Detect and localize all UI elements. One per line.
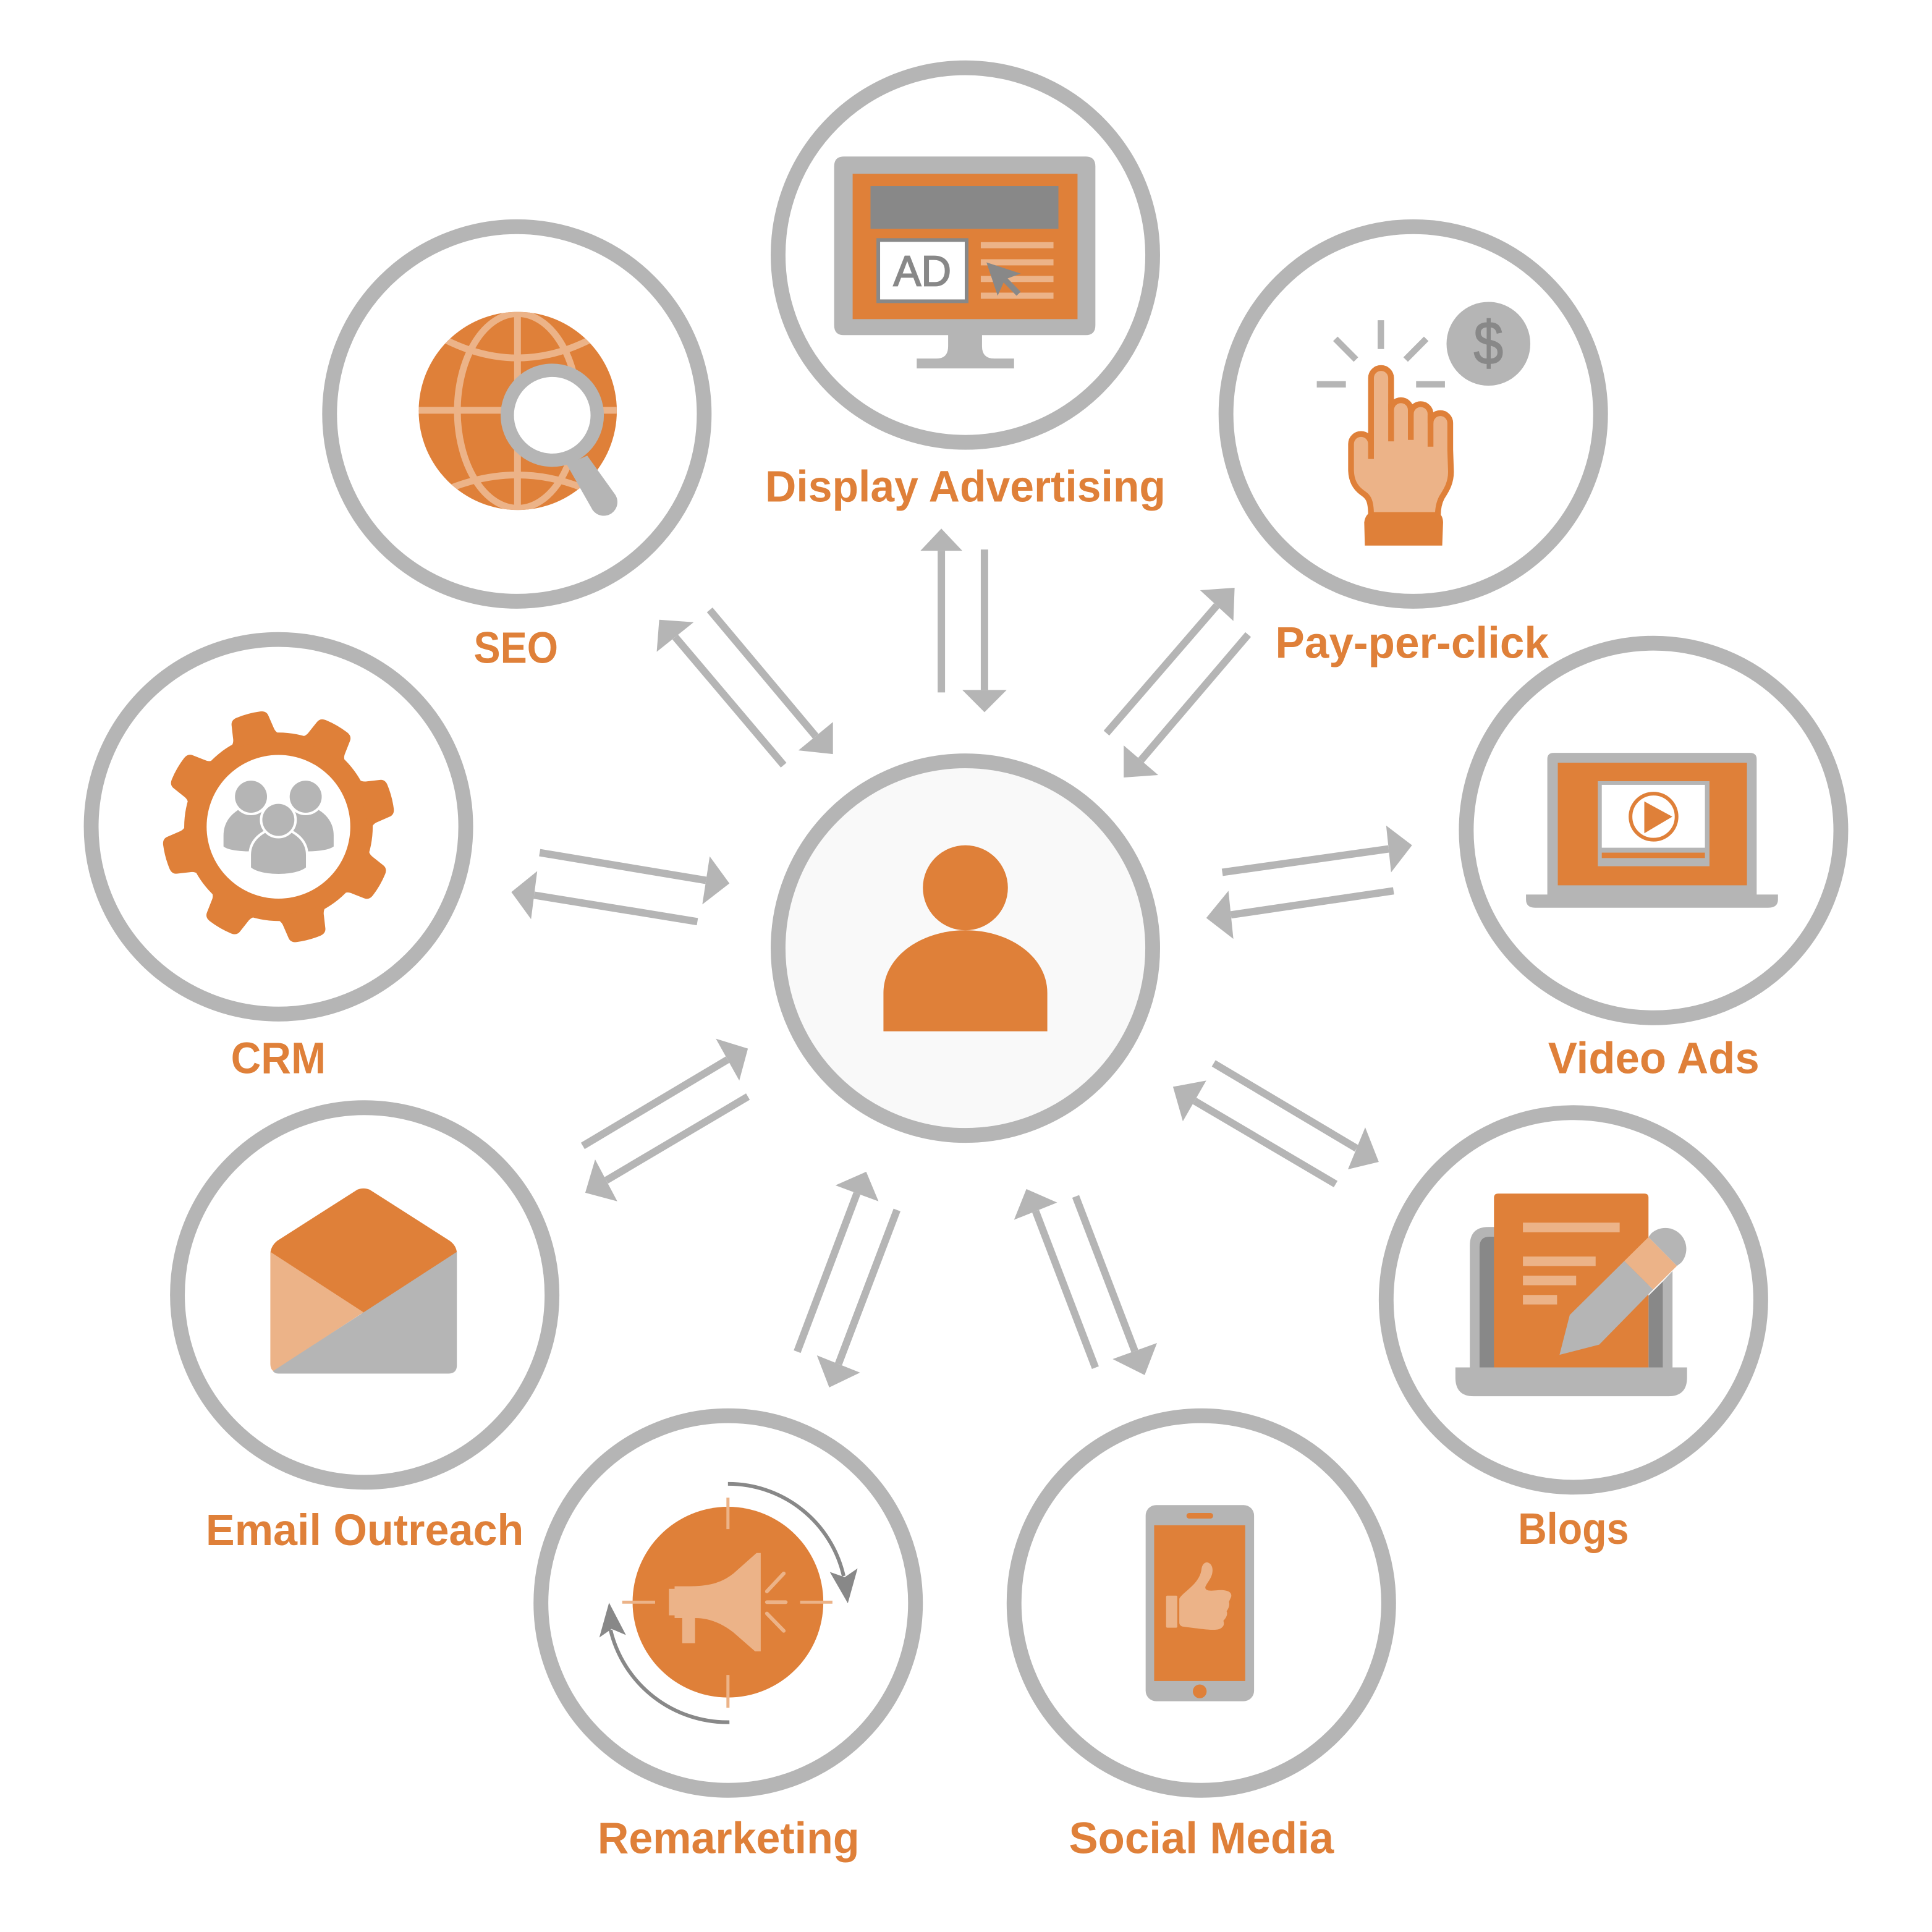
icon: monitor with ad <box>834 156 1095 368</box>
arrows: social media and customer <box>1014 1189 1157 1375</box>
arrows: pay-per-click and customer <box>1106 588 1248 777</box>
arrows: SEO and customer <box>657 610 833 765</box>
label: video ads: Video Ads <box>1548 1033 1760 1083</box>
arrows: email outreach and customer <box>583 1039 748 1201</box>
icon: laptop with document and pencil <box>1455 1193 1687 1396</box>
icon: monitor with ad: AD <box>893 247 951 295</box>
arrows: CRM and customer <box>511 853 729 922</box>
label: CRM: CRM <box>231 1033 326 1083</box>
icon: envelope <box>270 1188 457 1373</box>
panel: email outreach <box>177 1108 552 1555</box>
label: blogs: Blogs <box>1518 1504 1629 1554</box>
arrows: display advertising and customer <box>920 528 1007 712</box>
icon: hand clicking with dollar <box>1317 302 1530 546</box>
panel: SEO <box>329 227 704 673</box>
icon: gear with people <box>158 706 399 947</box>
arrows: video ads and customer <box>1206 826 1412 939</box>
label: SEO: SEO <box>474 624 558 673</box>
label: email outreach: Email Outreach <box>206 1506 523 1555</box>
icon: phone with thumbs up <box>1146 1505 1254 1701</box>
arrows: remarketing and customer <box>797 1172 897 1388</box>
label: pay-per-click: Pay-per-click <box>1275 619 1549 668</box>
panel: CRM <box>91 640 466 1083</box>
label: social media: Social Media <box>1069 1813 1334 1863</box>
panel: customer centre <box>778 761 1153 1135</box>
panel: display advertising <box>765 68 1166 511</box>
icon: person <box>883 845 1048 1032</box>
label: display advertising: Display Advertising <box>765 462 1166 511</box>
panel: pay-per-click <box>1226 227 1601 668</box>
icon: laptop with video <box>1526 753 1778 908</box>
arrows: blogs and customer <box>1173 1063 1379 1184</box>
panel: social media <box>1014 1416 1389 1863</box>
icon: globe with magnifier <box>418 311 617 516</box>
label: remarketing: Remarketing <box>598 1813 860 1863</box>
panel: video ads <box>1466 643 1841 1083</box>
icon: hand clicking with dollar: $ <box>1473 309 1503 378</box>
icon: megaphone with circular arrows <box>600 1484 858 1722</box>
panel: remarketing <box>541 1416 915 1863</box>
panel: blogs <box>1386 1112 1761 1554</box>
